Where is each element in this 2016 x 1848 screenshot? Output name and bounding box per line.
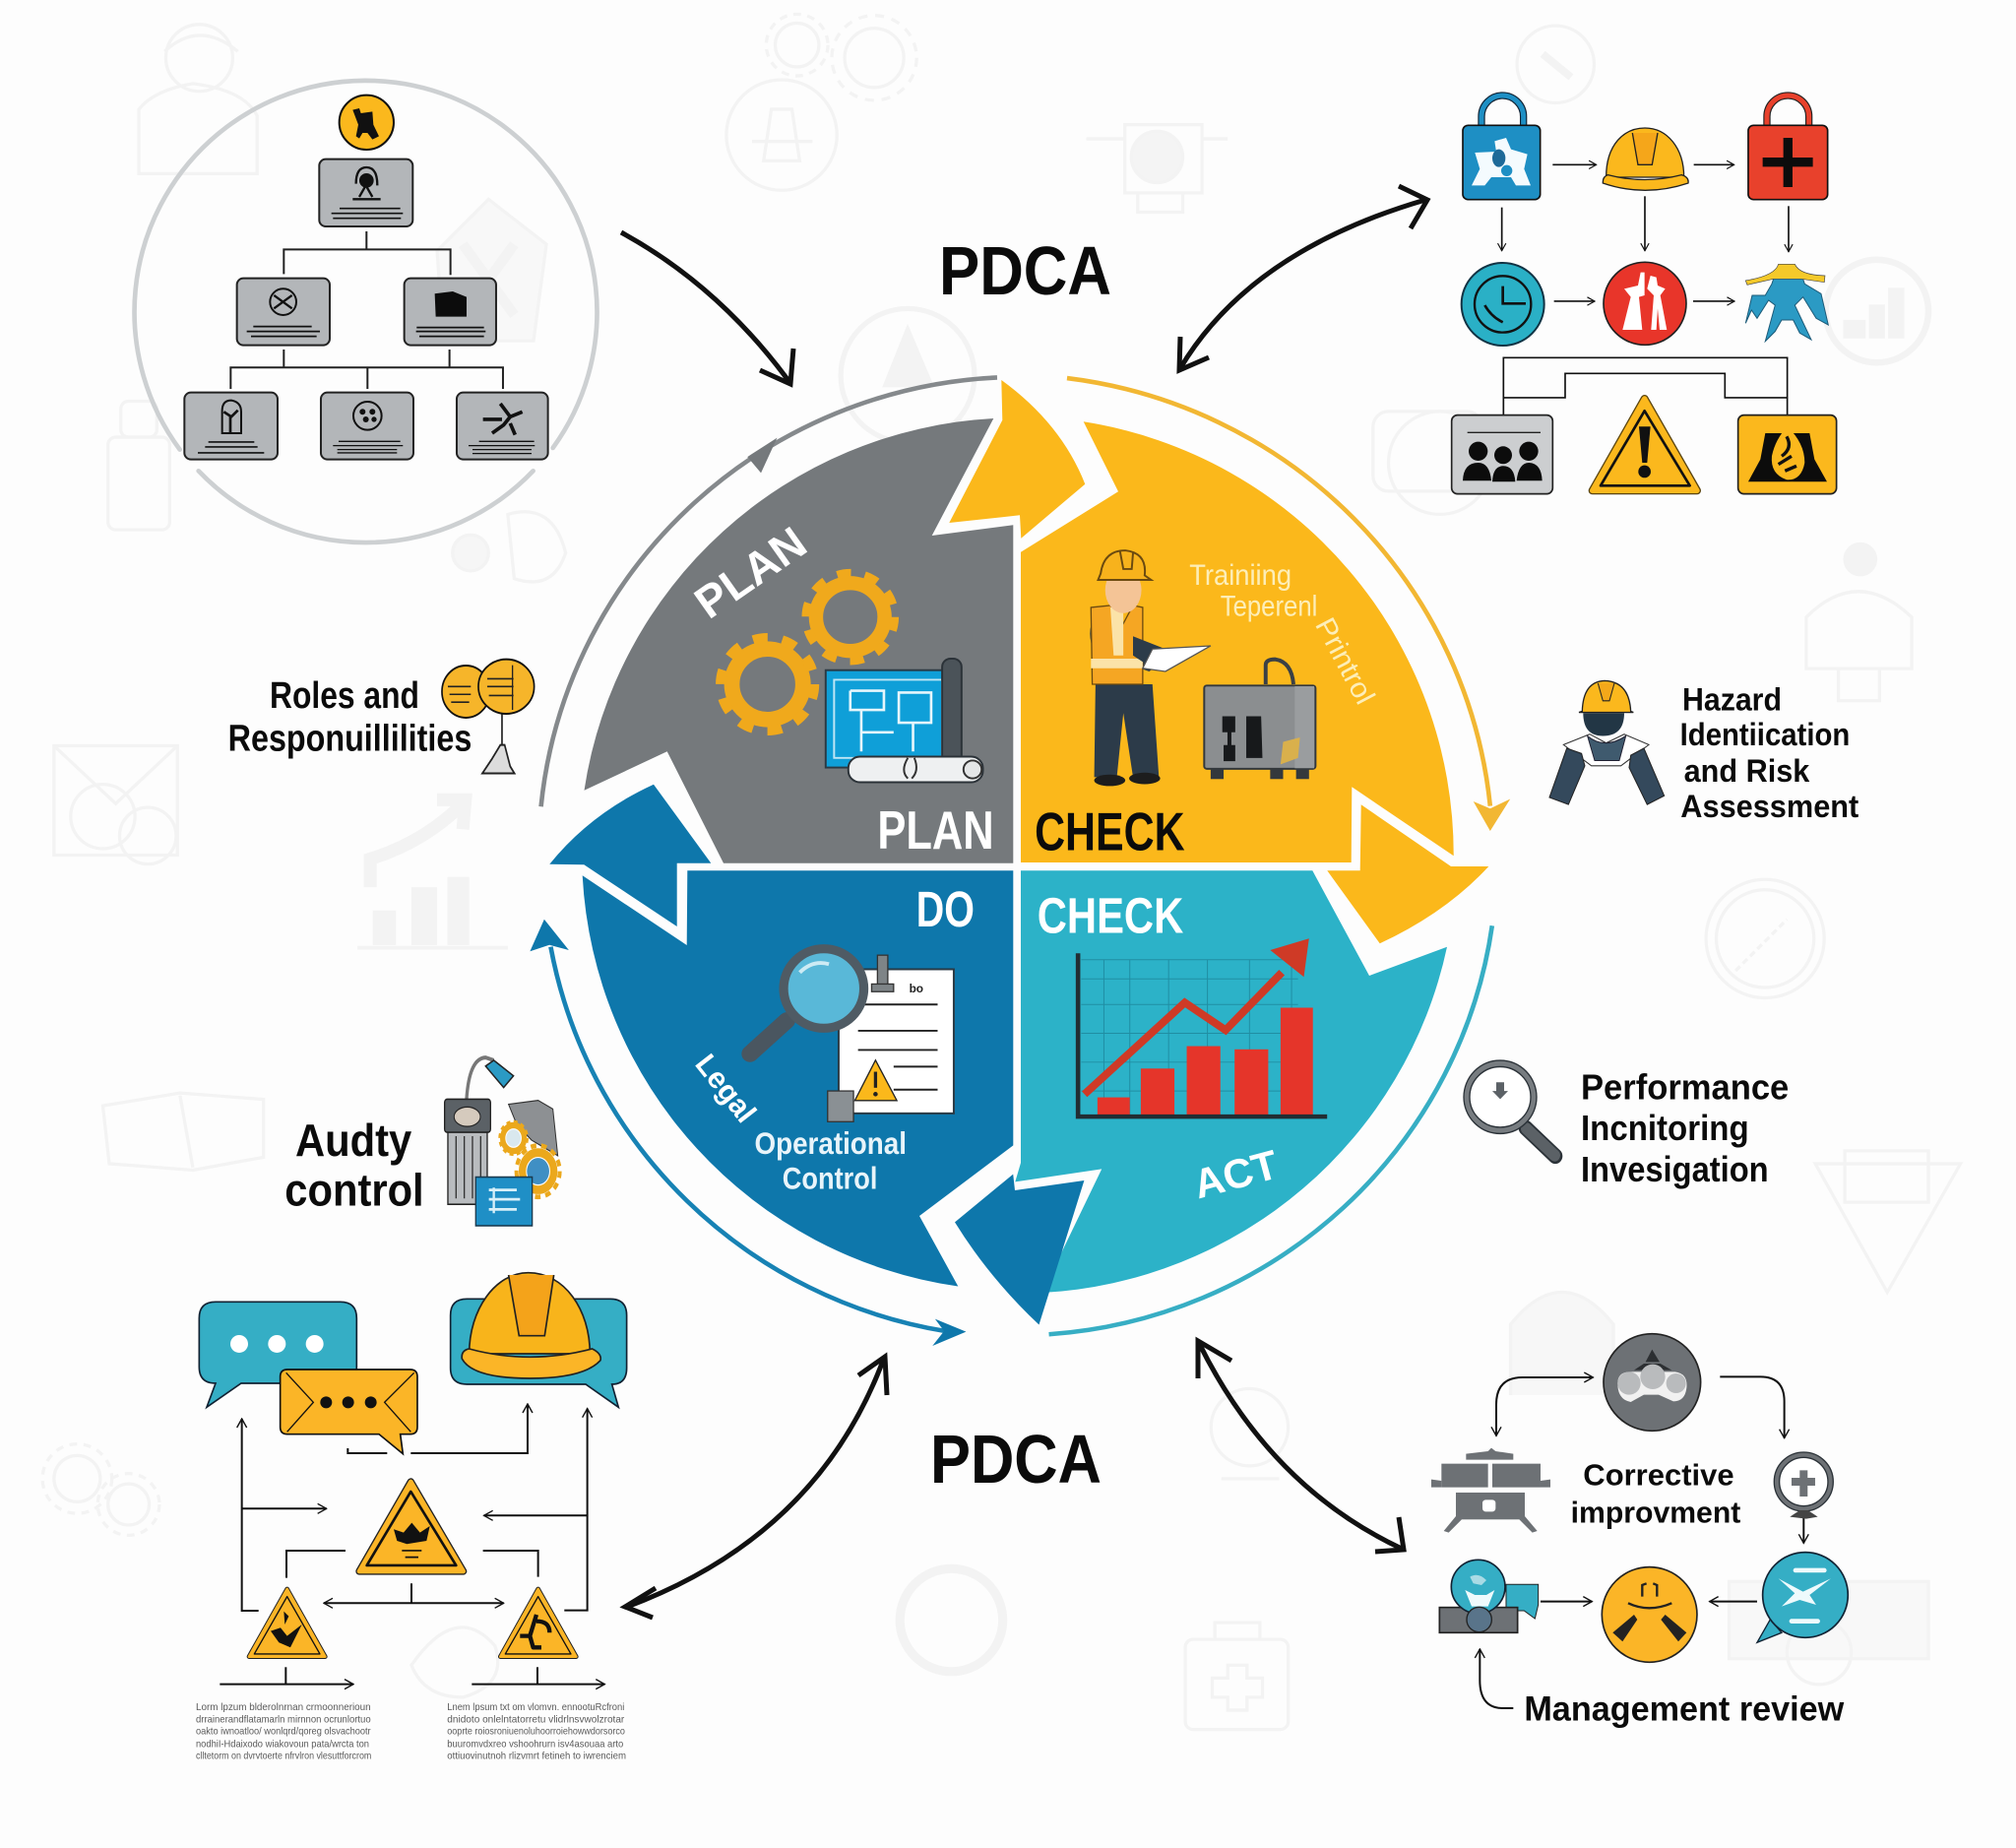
icon: teal bubble with hard hat [451, 1273, 627, 1407]
label: Hazard Identification and Risk Assessment: and Risk [1684, 752, 1810, 789]
box: bottom left [184, 393, 278, 460]
label: Printrol: Printrol [1308, 612, 1380, 710]
text block: left lorem: Lorm lpzum blderolnrnan crmoonnerioun [196, 1702, 371, 1713]
outer cycle arcs [530, 377, 1510, 1346]
title: PDCA top: PDCA [939, 232, 1111, 309]
icon: blueprint roll [826, 659, 983, 783]
label: Corrective improvment: improvment [1571, 1497, 1740, 1530]
icon: large warning triangle [359, 1482, 464, 1571]
outer arc: check (yellow) [1067, 378, 1510, 831]
icon: gears [721, 573, 894, 731]
arrows: review cycle [1480, 1376, 1803, 1708]
text block: left lorem: clltetorm on dvrvtoerte nfrvlron vlesuttforcrom [196, 1751, 371, 1761]
label: Performance Incnitoring Invesigation: Invesigation [1581, 1151, 1769, 1189]
arrowhead: blue left [549, 785, 711, 926]
panel: organisation chart [135, 81, 598, 542]
label: Roles and Responsibilities [228, 676, 472, 759]
label: Corrective improvment: Corrective [1583, 1458, 1734, 1492]
icon: red lock with cross [1748, 96, 1828, 200]
wedge: do blue [583, 870, 1013, 1286]
label: PLAN: PLAN [877, 799, 994, 860]
panel: PDCA wheel [530, 377, 1510, 1346]
icon: warning triangle right [500, 1589, 576, 1657]
icon: yellow badge [340, 96, 394, 150]
label: Audty control: Audty [295, 1115, 411, 1167]
box: top [319, 159, 412, 226]
arrowhead: yellow top [949, 380, 1085, 539]
arrows: flow connectors [220, 1404, 604, 1685]
label: Audty control [284, 1115, 424, 1216]
icon: document and magnifier [750, 949, 954, 1121]
label: Hazard Identification and Risk Assessment: Hazard [1682, 680, 1782, 718]
box: middle left [237, 279, 330, 346]
label: Corrective improvment [1571, 1458, 1740, 1530]
wedge labels and illustrations [686, 517, 1380, 1207]
icon: magnifier [1467, 1063, 1555, 1156]
box: bottom centre [321, 393, 413, 460]
label: Audty control: control [284, 1165, 424, 1216]
label: CHECK white: CHECK [1038, 888, 1183, 943]
label: Control: Control [783, 1162, 877, 1196]
wedge: plan gray [585, 418, 1013, 863]
text block: right lorem [447, 1702, 626, 1761]
label: Roles and Responsibilities: Roles and [270, 676, 419, 717]
connector lines [1503, 357, 1788, 415]
label: Hazard Identification and Risk Assessment: Identiication [1680, 716, 1850, 752]
label: Teperenl: Teperenl [1221, 591, 1317, 622]
icon: blue figure [1745, 264, 1828, 342]
icon: hazard worker [1549, 680, 1665, 804]
text block: left lorem: drrainerandflatamarln mirnnon ocrunlortuo [196, 1714, 371, 1725]
title: PDCA bottom: PDCA [930, 1421, 1102, 1498]
icon: gray grill [1431, 1448, 1550, 1533]
icon: teal speech bubble [199, 1302, 356, 1407]
label: Training: Trainiing [1189, 559, 1292, 592]
icon: worker with clipboard [1090, 550, 1211, 786]
text block: left lorem: oakto iwnoatloo/ wonlqrd/qoreg olsvachootr [196, 1727, 371, 1738]
wedge: check yellow [1021, 421, 1454, 862]
label: ACT: ACT [1188, 1141, 1284, 1207]
icon: yellow circle [1602, 1567, 1697, 1662]
box: middle right [405, 279, 496, 346]
icon: teal screen [1439, 1560, 1539, 1632]
label: Performance Incnitoring Invesigation [1581, 1068, 1789, 1189]
label: PLAN curved: PLAN [686, 517, 816, 628]
arrow: bottom right double [1198, 1341, 1404, 1552]
label: Legal: Legal [688, 1049, 762, 1129]
icon: people board [1452, 415, 1552, 494]
label: Hazard Identification and Risk Assessment [1680, 680, 1859, 824]
icon: warning triangle left [249, 1589, 325, 1657]
label: Hazard Identification and Risk Assessment: Assessment [1680, 788, 1859, 824]
arrow: org chart to wheel [621, 232, 793, 384]
arrows: flow [1502, 164, 1789, 301]
arrowhead: yellow right [1327, 804, 1488, 943]
label: Roles and Responsibilities: Responuillilities [228, 719, 472, 759]
label: Operational: Operational [754, 1126, 907, 1161]
arrow: top right double [1179, 186, 1427, 370]
icon: audit control equipment [445, 1057, 560, 1226]
label: Performance Incnitoring Invesigation: Incnitoring [1581, 1110, 1749, 1148]
text block: right lorem: ooprte roiosroniuenoluhoorroiehowwdorsorco [447, 1727, 625, 1738]
icon: hard hat [1603, 128, 1688, 190]
outer arc: act (teal) [1049, 925, 1492, 1334]
text block: right lorem: dnidoto onlelntatorretu vlidrlnsvwolzrotar [447, 1714, 625, 1725]
icon: plus magnifier [1777, 1455, 1831, 1519]
circle outline [135, 81, 598, 542]
icon: document and magnifier: bo [910, 983, 923, 995]
text block: right lorem: Lnem lpsum txt om vlomvn. ennootuRcfroni [447, 1702, 624, 1713]
label: Management review: Management review [1524, 1689, 1845, 1728]
label: CHECK black: CHECK [1035, 801, 1185, 861]
icon: machine [1204, 660, 1315, 779]
box: bottom right [457, 393, 548, 460]
icon: gray circle [1604, 1334, 1701, 1431]
text block: right lorem: ottiuovinutnoh rlizvmrt fetineh to iwrenciem [447, 1751, 626, 1761]
icon: warning triangle [1593, 399, 1697, 490]
connector lines [230, 231, 503, 389]
text block: left lorem [196, 1702, 371, 1761]
label: DO: DO [916, 881, 975, 937]
icon: blue lock [1463, 96, 1541, 200]
panel: safety icon flow top right [1452, 96, 1837, 494]
text block: right lorem: buuromvdxreo vshoohrurn isv4asouaa arto [447, 1739, 624, 1750]
icon: yellow hazard box [1738, 415, 1837, 494]
arrowhead: blue bottom [955, 1175, 1084, 1325]
outer arc: do (blue) [530, 920, 966, 1346]
label: Performance Incnitoring Invesigation: Performance [1581, 1068, 1789, 1108]
panel: communication flow bottom left [196, 1273, 627, 1761]
icon: yellow envelope bubble [281, 1370, 417, 1454]
chart: rising bars with arrow [1078, 938, 1327, 1116]
arrow: bottom left double [625, 1357, 887, 1618]
icon: teal bubble [1757, 1553, 1848, 1642]
panel: corrective improvement and management review [1431, 1334, 1848, 1728]
outer arc: plan (gray) [541, 377, 997, 806]
icon: red circle with figures [1604, 262, 1686, 345]
text block: left lorem: nodhiI-Hdaixodo wiakovoun pata/wrcta ton [196, 1739, 369, 1750]
icon: clock [1462, 263, 1544, 346]
wedge: act teal [1015, 870, 1447, 1293]
icon: balloons stand [442, 660, 535, 774]
